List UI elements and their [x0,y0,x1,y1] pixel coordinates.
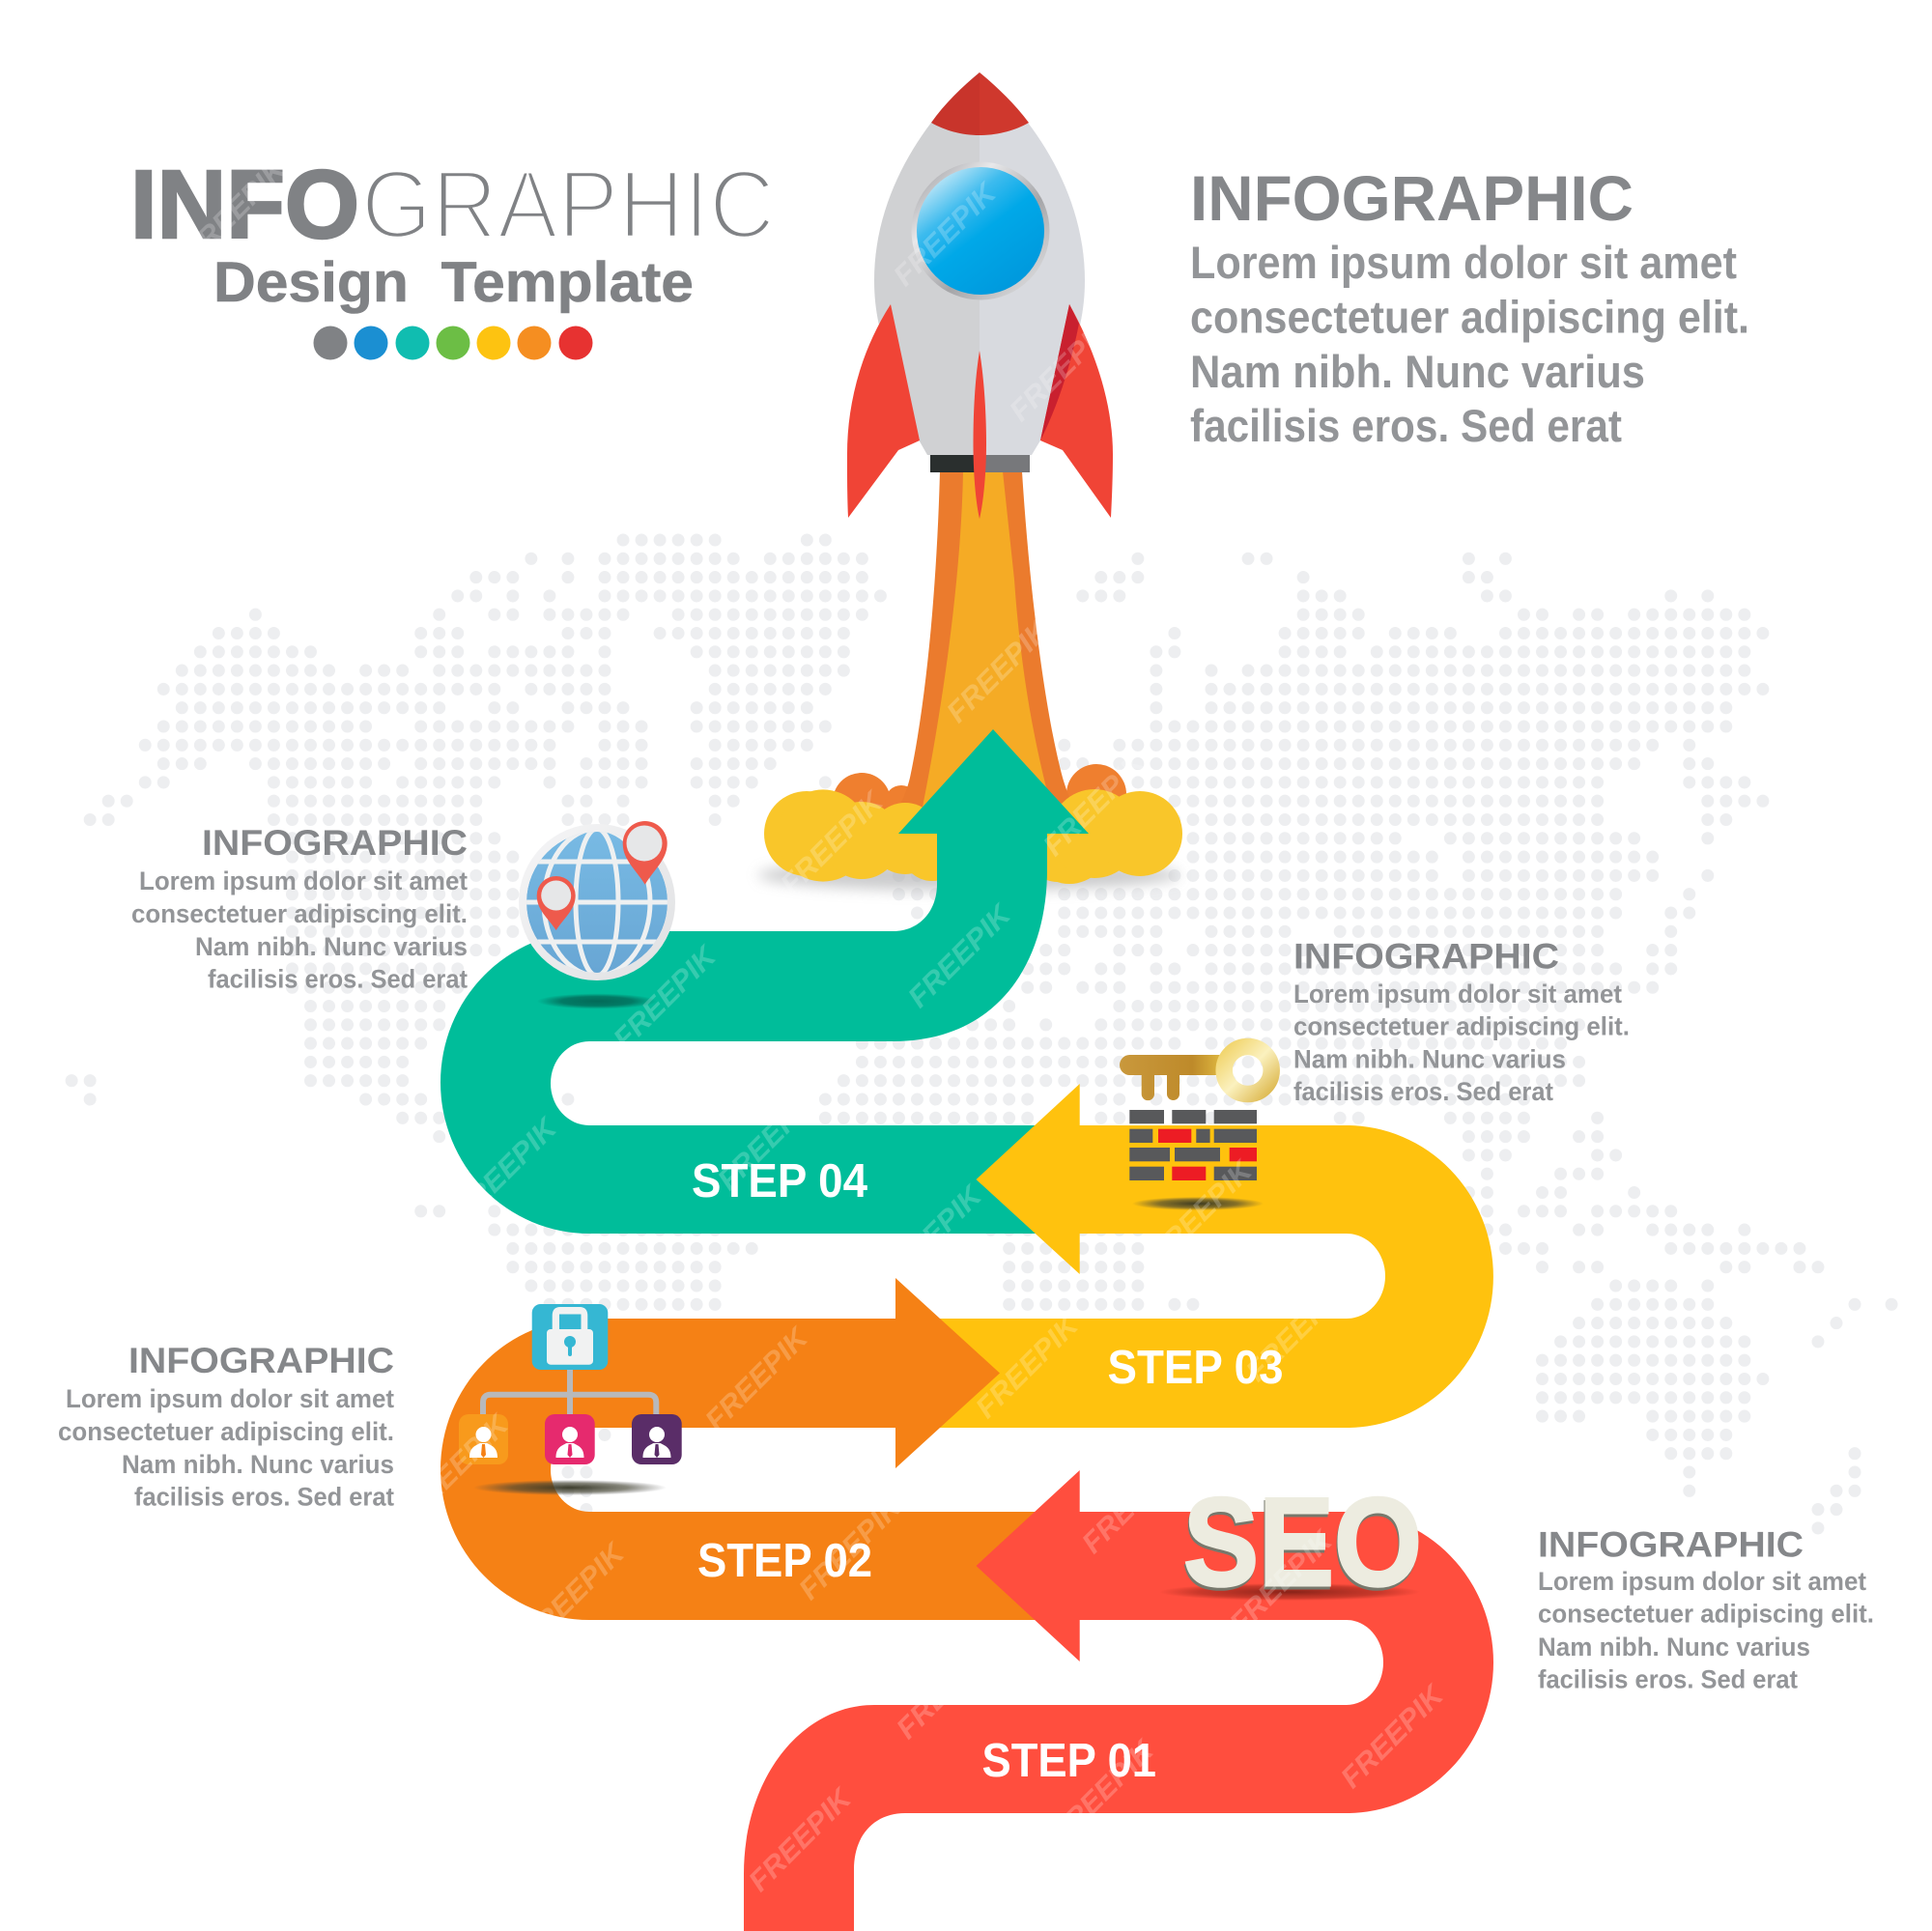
watermarks: FREEPIK [400,1407,516,1524]
SEO shadow [1159,1583,1420,1601]
person tile: orange [459,1414,508,1464]
globe rim [519,824,675,980]
SEO face: SEO [1183,1471,1422,1612]
watermarks: FREEPIK [178,152,294,269]
watermarks: FREEPIK [793,1490,909,1606]
body text: Lorem ipsum dolor sit amet [1190,237,1737,288]
watermarks: FREEPIK [1240,1271,1356,1388]
main title block [130,151,775,359]
left fin [847,304,920,518]
body: facilisis eros. Sed erat [1538,1665,1798,1694]
icon: key and brick wall [1120,1047,1271,1210]
body: Lorem ipsum dolor sit amet [66,1384,394,1413]
key text block [1293,937,1630,1106]
heading: INFOGRAPHIC [202,823,468,863]
body text: consectetuer adipiscing elit. [1190,292,1749,342]
watermarks: FREEPIK [1037,746,1153,863]
heading: INFOGRAPHIC [1538,1524,1804,1565]
watermarks: FREEPIK [1004,311,1120,428]
watermarks: FREEPIK [970,1308,1086,1425]
window [912,162,1049,299]
body text: Nam nibh. Nunc varius [1190,346,1645,397]
icon: SEO 3D word [1159,1471,1422,1615]
watermarks: FREEPIK [873,1178,989,1295]
key [1120,1047,1271,1100]
body: Nam nibh. Nunc varius [1293,1045,1566,1074]
body: facilisis eros. Sed erat [208,964,468,993]
centre fin [974,351,986,519]
watermarks: FREEPIK [699,1320,815,1437]
watermarks: FREEPIK [743,1781,859,1898]
body text [1190,237,1749,451]
colour dots row [313,327,593,359]
connector lines [483,1370,656,1415]
body text: facilisis eros. Sed erat [1190,400,1622,451]
label: step 03: STEP 03 [1107,1342,1283,1394]
person tile: pink [545,1414,595,1464]
globe disk and grid [526,832,668,973]
body: Lorem ipsum dolor sit amet [1293,980,1622,1008]
icon: lock and people network [459,1304,682,1495]
ribbon: step 02 orange [440,1278,1063,1620]
small pin [537,876,576,930]
lock text block [58,1341,394,1511]
big pin [623,821,668,885]
label: step 02: STEP 02 [697,1535,872,1587]
watermarks: FREEPIK [941,612,1057,729]
watermarks: FREEPIK [902,897,1018,1014]
body: facilisis eros. Sed erat [134,1482,394,1511]
wall shadow [1132,1197,1264,1210]
body: consectetuer adipiscing elit. [58,1417,394,1446]
person tile: purple [632,1414,682,1464]
body [131,866,468,993]
step labels [692,1155,1283,1787]
body: Nam nibh. Nunc varius [1538,1633,1810,1661]
heading: INFOGRAPHIC [128,1341,394,1380]
top right text block [1190,162,1749,451]
label: step 04: STEP 04 [692,1155,867,1207]
fuselage left half [874,72,980,455]
rocket exhaust and smoke clouds [758,471,1182,891]
brick wall [1129,1110,1257,1180]
body: consectetuer adipiscing elit. [131,899,468,928]
globe text block [131,823,468,993]
label: step 01: STEP 01 [981,1735,1156,1787]
subtitle: Design Template [213,251,694,314]
rocket [847,72,1113,519]
watermarks: FREEPIK [1045,1733,1161,1850]
watermarks: FREEPIK [775,784,891,901]
watermarks: FREEPIK [888,176,1004,293]
icon: globe with map pins [512,821,682,1008]
body: consectetuer adipiscing elit. [1538,1600,1874,1629]
body: Nam nibh. Nunc varius [122,1450,394,1479]
nose cone [931,72,1029,135]
watermarks [178,152,1451,1898]
outer flame [884,471,1087,831]
body [1538,1567,1874,1694]
ribbon: step 04 green with up arrow [440,729,1089,1234]
body [58,1384,394,1511]
watermarks: FREEPIK [1335,1678,1451,1795]
heading: INFOGRAPHIC [1190,162,1634,234]
network shadow [473,1480,667,1495]
body: Lorem ipsum dolor sit amet [139,866,468,895]
inner flame [918,471,1058,831]
ribbon: step 01 red [744,1470,1493,1931]
lock tile [532,1304,608,1370]
watermarks: FREEPIK [448,1111,564,1228]
fin dark sliver [1040,304,1079,440]
watermarks: FREEPIK [1076,1443,1192,1560]
body: consectetuer adipiscing elit. [1293,1012,1630,1041]
body: Nam nibh. Nunc varius [195,932,468,961]
SEO depth: SEO [1182,1474,1421,1615]
title: GRAPHIC thin: GRAPHIC [361,151,775,259]
body: Lorem ipsum dolor sit amet [1538,1567,1866,1596]
orange smoke [833,764,1126,831]
body [1293,980,1630,1106]
globe shadow [537,993,657,1008]
watermarks: FREEPIK [712,1080,828,1197]
cloud shadow [758,860,1179,891]
world dot map background [71,540,1891,1528]
watermarks: FREEPIK [1144,1153,1260,1270]
right fin [1040,304,1113,518]
ribbon: step 03 yellow [918,1084,1493,1428]
nozzle [930,455,1030,472]
watermarks: FREEPIK [1224,1523,1340,1640]
watermarks: FREEPIK [516,1536,632,1653]
watermarks: FREEPIK [891,1629,1007,1746]
yellow smoke [764,789,1182,884]
body: facilisis eros. Sed erat [1293,1077,1553,1106]
SEO text block [1538,1524,1874,1694]
watermarks: FREEPIK [608,939,724,1056]
heading: INFOGRAPHIC [1293,937,1559,976]
title: INFO bold: INFO [130,151,359,259]
fuselage right half [980,72,1085,455]
